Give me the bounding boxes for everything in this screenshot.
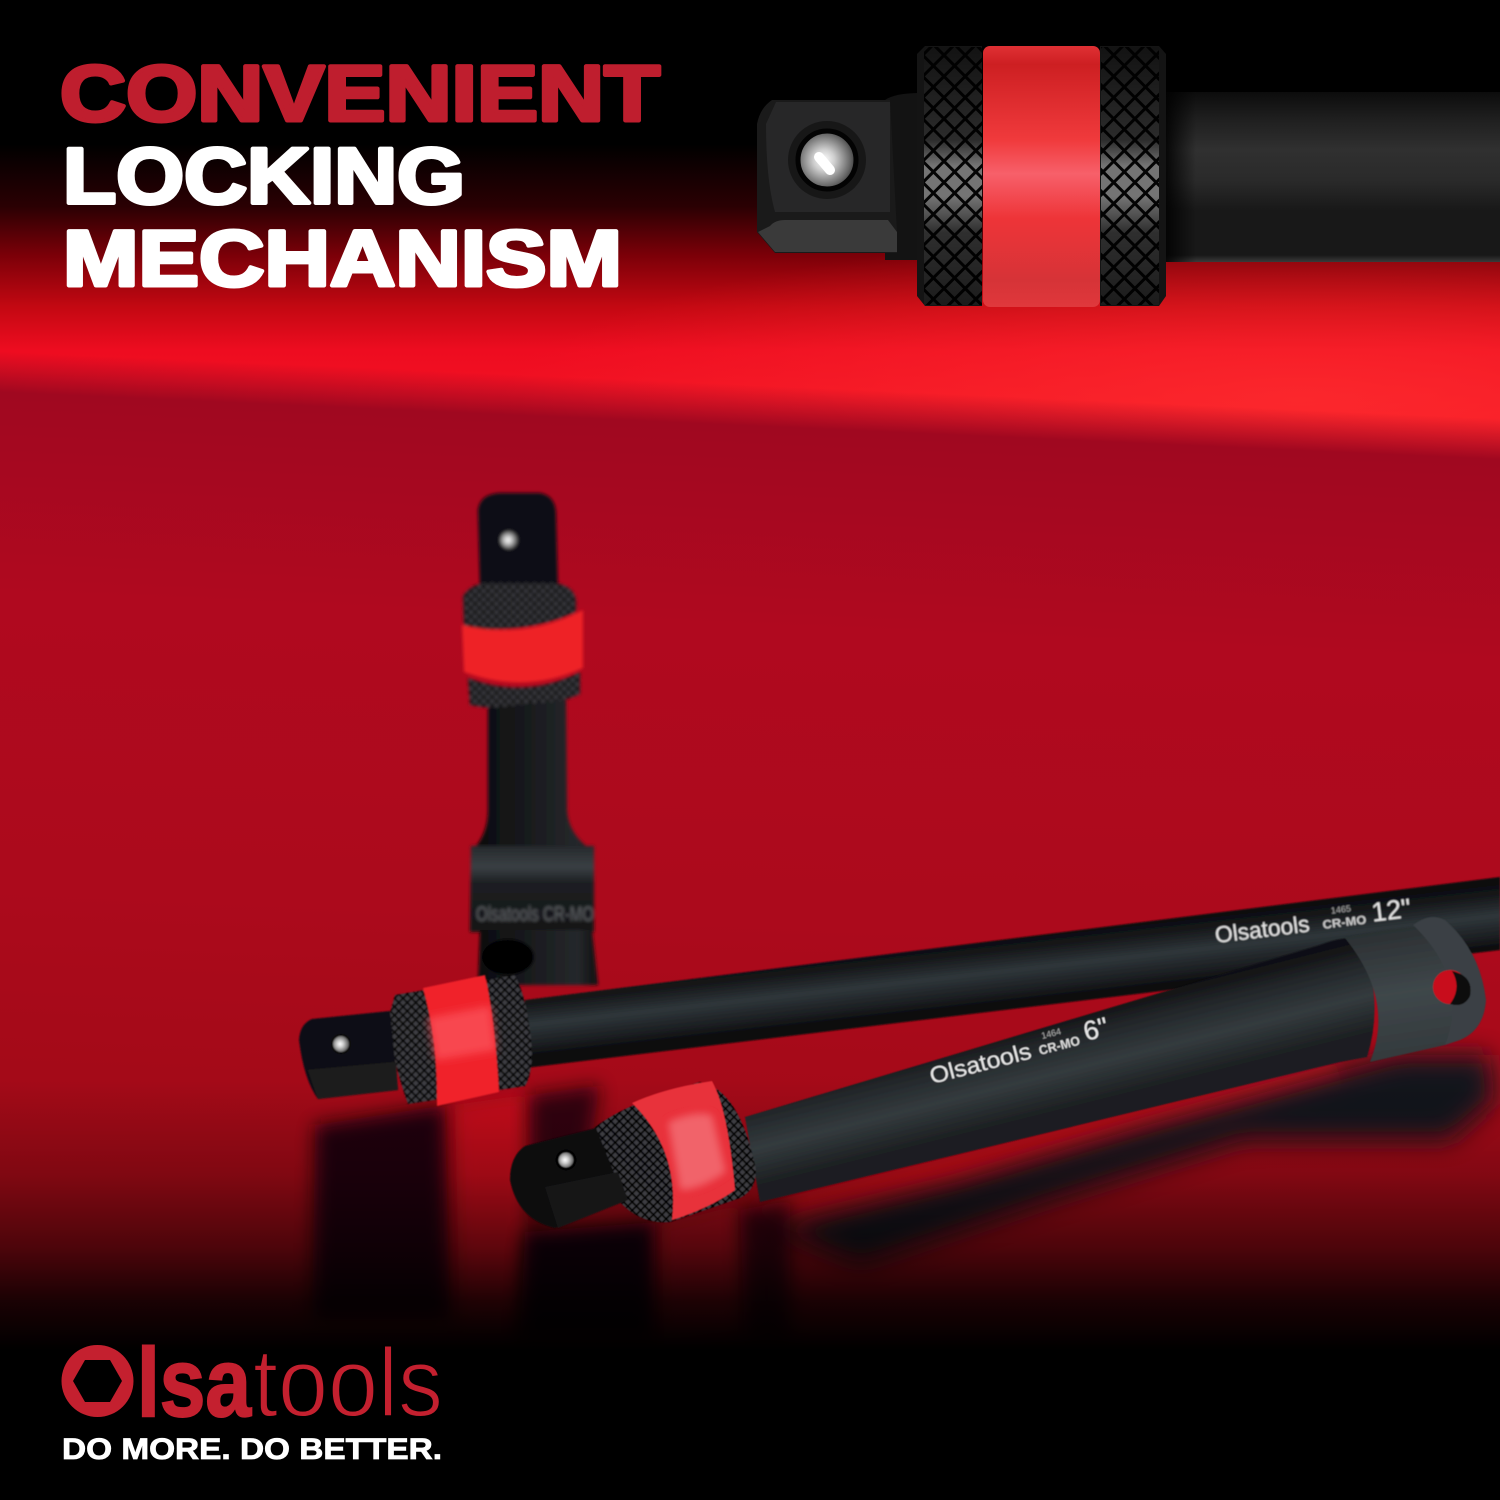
logo word: lsa: lsa [137, 1328, 252, 1437]
6 inch bar: pin hole shadow [1450, 971, 1471, 1005]
close-up: square drive face [766, 102, 890, 212]
title line: locking: LOCKING [63, 131, 465, 220]
6 inch bar: knurled collar [592, 1082, 756, 1222]
12 inch bar: engraved marking: 1465 [1330, 903, 1351, 916]
standing bar: socket pin hole [482, 939, 534, 975]
close-up: ball highlight [819, 157, 830, 170]
6 inch bar: square drive facet [545, 1172, 628, 1228]
brand logo [61, 1328, 443, 1466]
12 inch bar: engraved marking: 12" [1370, 893, 1413, 928]
standing bar: engraved text: Olsatools CR-MO [476, 903, 594, 926]
6 inch bar: square drive [510, 1128, 625, 1228]
6 inch bar: sleeve highlight [668, 1114, 726, 1190]
standing bar: neck [471, 700, 594, 852]
close-up: detent ball [798, 131, 856, 189]
close-up: square drive lower facet [758, 220, 897, 252]
6 inch bar: detent ball [557, 1151, 575, 1169]
12 inch bar: engraved marking [1213, 893, 1413, 948]
background: bottom black fade [0, 1080, 1500, 1500]
6 inch bar: engraved marking: 1464 [1040, 1026, 1062, 1041]
12 inch bar: engraved marking: Olsatools [1213, 911, 1311, 948]
background: red wall fading to black [0, 0, 1500, 520]
12 inch bar: sleeve highlight [428, 1006, 496, 1060]
close-up extension bar [757, 46, 1500, 307]
standing bar: upper knurled collar [463, 583, 576, 629]
close-up: left knurled collar [917, 46, 982, 306]
title line: convenient: CONVENIENT [60, 48, 660, 138]
close-up: ball socket [788, 121, 866, 199]
6 inch bar: socket [1345, 927, 1466, 1062]
standing bar: socket [470, 846, 594, 932]
12 inch bar: shaft [525, 877, 1500, 1068]
logo icon: O with hexagon hole [61, 1345, 133, 1417]
floor reflections [312, 1055, 1495, 1340]
standing bar: red locking sleeve [462, 610, 583, 683]
6 inch extension bar [510, 917, 1486, 1228]
6 inch bar: shaft [745, 938, 1375, 1202]
tagline: DO MORE. DO BETTER. [62, 1433, 442, 1466]
title [60, 48, 660, 302]
background: brighter glow on the right of the wall [0, 220, 1500, 520]
standing bar: socket groove [478, 930, 598, 985]
standing extension bar [462, 493, 598, 985]
close-up: shaft shadow by the collar [1166, 92, 1196, 262]
12 inch bar: red locking sleeve [423, 975, 499, 1106]
standing bar: detent ball [500, 531, 518, 549]
6 inch bar: engraved marking: Olsatools [927, 1038, 1034, 1089]
12 inch bar: square drive lower facet [308, 1062, 398, 1099]
12 inch bar: square drive [299, 1011, 398, 1099]
6 inch bar: socket rim [1413, 917, 1486, 1045]
title line: mechanism: MECHANISM [63, 214, 622, 302]
logo word: tools: tools [253, 1328, 443, 1437]
12 inch bar: engraved marking: CR-MO [1322, 913, 1367, 932]
close-up: red locking sleeve [983, 46, 1100, 307]
6 inch bar: socket pin hole [1433, 970, 1467, 1004]
background: glossy red table surface [0, 340, 1500, 1500]
6 inch bar: engraved marking [925, 1012, 1112, 1089]
close-up: shaft [1160, 92, 1500, 262]
6 inch bar: red locking sleeve [632, 1081, 735, 1220]
close-up: square drive [757, 100, 897, 253]
12 inch bar: knurled collar [388, 975, 532, 1104]
standing bar: square drive [478, 493, 558, 590]
standing bar: lower knurled collar [468, 672, 580, 709]
6 inch bar: engraved marking: 6" [1080, 1012, 1111, 1047]
12 inch bar: detent ball [332, 1035, 350, 1053]
12 inch extension bar [299, 877, 1500, 1106]
close-up: right knurled collar [1100, 46, 1166, 306]
6 inch bar: engraved marking: CR-MO [1037, 1033, 1082, 1058]
close-up: neck [885, 93, 920, 260]
